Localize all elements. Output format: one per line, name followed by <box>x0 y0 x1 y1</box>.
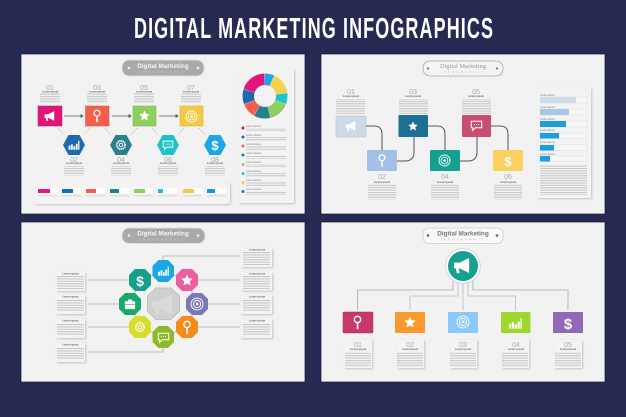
text cards: Lorem ipsum <box>508 347 525 351</box>
badge heading <box>122 228 205 244</box>
tree connectors <box>358 281 568 310</box>
step text: upper row: Lorem ipsum <box>89 90 106 94</box>
progress bar card <box>537 88 591 198</box>
step text: lower row <box>368 174 522 200</box>
step text: upper row: 03 <box>409 89 417 96</box>
progress bar card: Lorem ipsum <box>540 105 555 109</box>
donut legend: Lorem ipsum <box>246 124 261 128</box>
step text: lower row: Lorem ipsum <box>374 180 391 184</box>
step text: upper row <box>40 85 201 102</box>
step text: lower row: Lorem ipsum <box>160 161 177 165</box>
hexagons with icons <box>63 135 226 155</box>
panel: octagon ring <box>21 222 305 382</box>
badge heading: Digital Marketing <box>437 230 489 238</box>
progress bar card: Lorem ipsum <box>540 128 555 132</box>
badge heading: INFOGRAPHIC <box>441 70 485 74</box>
step text: lower row: Lorem ipsum <box>500 180 517 184</box>
step text: upper row: 03 <box>93 85 101 92</box>
donut legend: Lorem ipsum <box>246 187 261 191</box>
step text: upper row: 05 <box>140 85 148 92</box>
text cards: Lorem ipsum <box>350 347 367 351</box>
right text cards: Lorem ipsum <box>249 294 266 298</box>
step text: lower row: 04 <box>441 174 449 181</box>
step text: lower row: Lorem ipsum <box>437 180 454 184</box>
octagon icons: $ <box>136 273 144 289</box>
step text: upper row: Lorem ipsum <box>343 94 360 98</box>
step text: lower row: Lorem ipsum <box>113 161 130 165</box>
badge heading: INFOGRAPHIC <box>140 70 186 74</box>
donut legend: Lorem ipsum <box>246 160 261 164</box>
leader lines <box>88 256 240 352</box>
panel: hierarchy tree <box>321 222 605 382</box>
donut legend <box>242 124 286 195</box>
hexagons with icons: $ <box>211 138 219 153</box>
progress bar card: Lorem ipsum <box>540 93 555 97</box>
panel: stepped flow with progress bars <box>321 54 605 214</box>
right text cards: Lorem ipsum <box>249 272 266 276</box>
text cards: Lorem ipsum <box>402 347 419 351</box>
category boxes: $ <box>564 316 573 333</box>
right text cards: Lorem ipsum <box>249 248 266 252</box>
step text: upper row: 01 <box>46 85 54 92</box>
text cards: Lorem ipsum <box>560 347 577 351</box>
progress bar card: Lorem ipsum <box>540 140 555 144</box>
badge heading <box>122 60 204 76</box>
step text: upper row: Lorem ipsum <box>136 90 153 94</box>
donut legend: Lorem ipsum <box>246 178 261 182</box>
dashed connectors <box>58 128 205 135</box>
text cards: 01 <box>354 342 362 349</box>
step text: lower row: 06 <box>504 174 512 181</box>
step text: upper row: 05 <box>472 89 480 96</box>
step text: upper row: 07 <box>187 85 195 92</box>
badge heading: Digital Marketing <box>440 63 487 70</box>
right text cards: Lorem ipsum <box>249 318 266 322</box>
progress bar card: Lorem ipsum <box>540 117 555 121</box>
ring links <box>130 271 197 337</box>
flow boxes with icons <box>336 115 523 171</box>
step text: lower row: Lorem ipsum <box>207 161 224 165</box>
step text: upper row: Lorem ipsum <box>42 90 59 94</box>
badge heading: Digital Marketing <box>137 63 189 70</box>
badge heading <box>423 61 503 76</box>
connectors <box>366 126 508 161</box>
left text cards: Lorem ipsum <box>62 318 79 322</box>
squares with icons <box>38 106 203 126</box>
donut legend: Lorem ipsum <box>246 133 261 137</box>
left text cards <box>56 272 85 362</box>
step text: upper row <box>336 89 491 114</box>
step text: lower row: 02 <box>70 157 78 164</box>
badge heading: INFOGRAPHIC <box>140 238 186 242</box>
step text: lower row: 04 <box>117 157 125 164</box>
step text: upper row: 01 <box>347 89 355 96</box>
step text: upper row: Lorem ipsum <box>468 94 485 98</box>
right text cards <box>241 248 272 338</box>
bottom legend bar <box>34 182 230 204</box>
step text: upper row: Lorem ipsum <box>183 90 200 94</box>
text cards: 03 <box>459 342 467 349</box>
step text: lower row: 02 <box>378 174 386 181</box>
donut legend: Lorem ipsum <box>246 169 261 173</box>
text cards: Lorem ipsum <box>455 347 472 351</box>
arrows between squares <box>64 115 178 117</box>
badge heading <box>423 228 503 244</box>
step text: upper row: Lorem ipsum <box>405 94 422 98</box>
donut legend: Lorem ipsum <box>246 142 261 146</box>
left text cards: Lorem ipsum <box>62 342 79 346</box>
step text: lower row: Lorem ipsum <box>66 161 83 165</box>
badge heading: INFOGRAPHIC <box>441 238 485 242</box>
octagon icons <box>119 260 208 348</box>
step text: lower row: 06 <box>164 157 172 164</box>
panel: timeline with donut <box>21 54 305 214</box>
category boxes <box>343 312 583 333</box>
left text cards: Lorem ipsum <box>62 294 79 298</box>
badge heading: Digital Marketing <box>137 230 189 238</box>
donut legend: Lorem ipsum <box>246 151 261 155</box>
sidebar card <box>239 69 294 203</box>
title: DIGITAL MARKETING INFOGRAPHICS <box>134 13 493 45</box>
text cards: 02 <box>406 342 414 349</box>
step text: lower row: 08 <box>211 157 219 164</box>
left text cards: Lorem ipsum <box>62 272 79 276</box>
flow boxes with icons: $ <box>504 154 512 169</box>
hub circle icon <box>446 249 480 283</box>
text cards: 04 <box>512 342 520 349</box>
text cards: 05 <box>564 342 572 349</box>
text cards <box>344 340 582 368</box>
progress bar card: Lorem ipsum <box>540 152 555 156</box>
step text: lower row <box>64 157 225 176</box>
centre octagon <box>148 288 180 320</box>
donut chart <box>248 79 282 113</box>
